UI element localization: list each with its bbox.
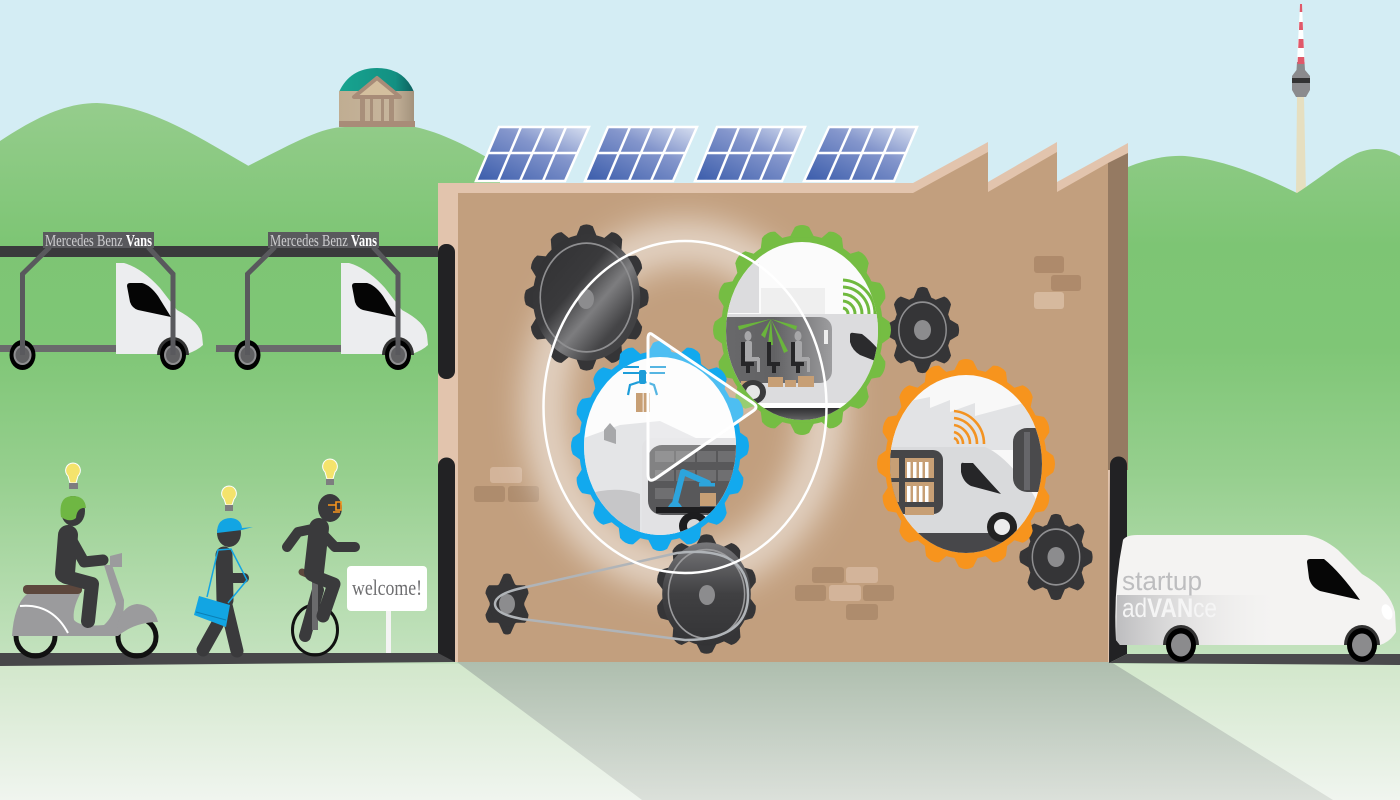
robot arm	[675, 472, 708, 503]
van cab	[116, 263, 203, 354]
sponsored cab carriage 2	[216, 231, 428, 370]
van cab	[341, 263, 428, 354]
rear wheel	[16, 636, 55, 656]
scooter rider	[12, 463, 158, 656]
windshield	[961, 463, 1001, 494]
wifi icon orange	[954, 411, 984, 444]
house	[604, 423, 616, 444]
post	[312, 578, 318, 630]
startup advance van	[1115, 535, 1396, 662]
box on conveyor	[700, 493, 716, 506]
van body	[643, 438, 736, 535]
tv tower	[1292, 4, 1310, 194]
solar panel 1	[476, 127, 589, 181]
front fender	[116, 604, 158, 636]
factory outer wall and roof	[438, 142, 1128, 662]
bag	[194, 596, 230, 627]
walking courier	[194, 486, 253, 651]
scooter body	[12, 565, 124, 636]
bulb	[323, 459, 337, 485]
chassis bar	[0, 345, 116, 352]
left door top	[438, 244, 455, 379]
front wheel	[382, 337, 414, 370]
bricks bottom	[795, 567, 894, 620]
green scene	[716, 242, 879, 422]
unicyclist	[287, 459, 355, 655]
head	[61, 496, 85, 526]
wheel	[292, 605, 338, 655]
van text startup: startup	[1122, 566, 1202, 596]
sign: Mercedes Benz Vans	[45, 231, 152, 250]
left door bottom	[438, 458, 455, 662]
building shadow on ground	[457, 662, 1333, 800]
stripe	[20, 606, 68, 633]
play circle	[544, 241, 826, 573]
video play button	[544, 241, 826, 573]
torso	[224, 555, 225, 600]
side window	[824, 330, 828, 344]
torso	[314, 528, 319, 572]
arm	[224, 557, 244, 578]
solar panel 4	[804, 127, 917, 181]
cargo shelves	[890, 450, 943, 515]
front wheel	[157, 337, 189, 370]
gear: small dark belt pulley	[482, 573, 532, 635]
seats and passengers	[743, 331, 810, 373]
gear: green, passenger van	[713, 225, 891, 435]
packages	[741, 376, 814, 387]
drive belt	[495, 552, 748, 640]
conveyor	[656, 507, 716, 513]
factory side wall	[1108, 153, 1128, 470]
rear wheel	[234, 340, 260, 370]
seat	[302, 572, 316, 578]
welcome sign	[347, 566, 427, 653]
leg	[66, 577, 92, 621]
gear: small dark right	[886, 287, 959, 373]
cap	[217, 518, 253, 533]
bricks left	[474, 467, 539, 502]
glasses	[328, 502, 341, 512]
leg back	[305, 590, 318, 636]
factory	[438, 142, 1128, 663]
factory inner wall	[458, 152, 1108, 662]
green rays	[738, 319, 771, 330]
arm	[70, 537, 103, 562]
welcome sign: welcome!	[352, 575, 422, 600]
rear wheel	[10, 340, 36, 370]
windshield	[850, 333, 878, 362]
rear wheel	[1163, 625, 1199, 662]
domed building	[339, 68, 415, 127]
bricks top right	[1034, 256, 1081, 309]
hills	[0, 103, 1400, 330]
headlight	[1380, 603, 1394, 621]
hanger frame	[22, 247, 173, 355]
handlebar	[110, 553, 122, 567]
cab window	[352, 283, 396, 317]
gear: large dark bottom	[655, 534, 758, 654]
chassis bar	[216, 345, 341, 352]
road right	[1109, 654, 1400, 665]
solar panel 3	[695, 127, 805, 181]
door gradient band	[1116, 595, 1282, 645]
drone package	[636, 393, 650, 412]
van body	[1115, 535, 1396, 645]
cargo window	[716, 317, 832, 383]
hanger frame	[248, 247, 398, 355]
blue scene	[584, 357, 736, 535]
solar panels	[476, 127, 917, 181]
orange scene	[890, 375, 1042, 553]
gear: dark lower right	[1019, 514, 1093, 600]
wheel	[679, 513, 706, 532]
road left	[0, 653, 455, 666]
windshield	[1307, 559, 1360, 600]
glow around play button	[545, 242, 825, 572]
cargo window	[648, 445, 736, 515]
ground	[0, 664, 1400, 800]
green land	[0, 245, 1400, 665]
helmet	[60, 496, 86, 520]
play triangle	[648, 334, 756, 480]
torso	[65, 535, 68, 573]
sky	[0, 0, 1400, 420]
front wheel	[118, 618, 156, 656]
sponsored cab carriage 1	[0, 231, 203, 370]
sign: Mercedes Benz Vans	[270, 231, 377, 250]
solar panel 2	[585, 127, 697, 181]
van text advance: adVANce	[1122, 593, 1217, 623]
gear: large dark top	[524, 224, 649, 371]
arms	[287, 528, 355, 547]
front wheel	[1344, 625, 1380, 662]
seat	[23, 585, 82, 594]
wifi icon green	[843, 280, 875, 314]
strap	[207, 549, 247, 603]
rear wheel	[740, 380, 766, 404]
rear cargo window	[1013, 428, 1042, 492]
cab window	[127, 283, 171, 317]
right door	[1109, 456, 1127, 663]
bulb	[222, 486, 236, 511]
leg front	[316, 577, 334, 616]
wheel	[987, 512, 1017, 542]
bulb	[66, 463, 80, 489]
gear: blue, drone van	[571, 341, 752, 551]
legs	[203, 605, 237, 651]
head	[217, 519, 241, 547]
gear: orange, logistics van	[877, 359, 1055, 569]
head	[318, 494, 342, 522]
top rail	[0, 246, 442, 257]
drone	[623, 366, 666, 395]
